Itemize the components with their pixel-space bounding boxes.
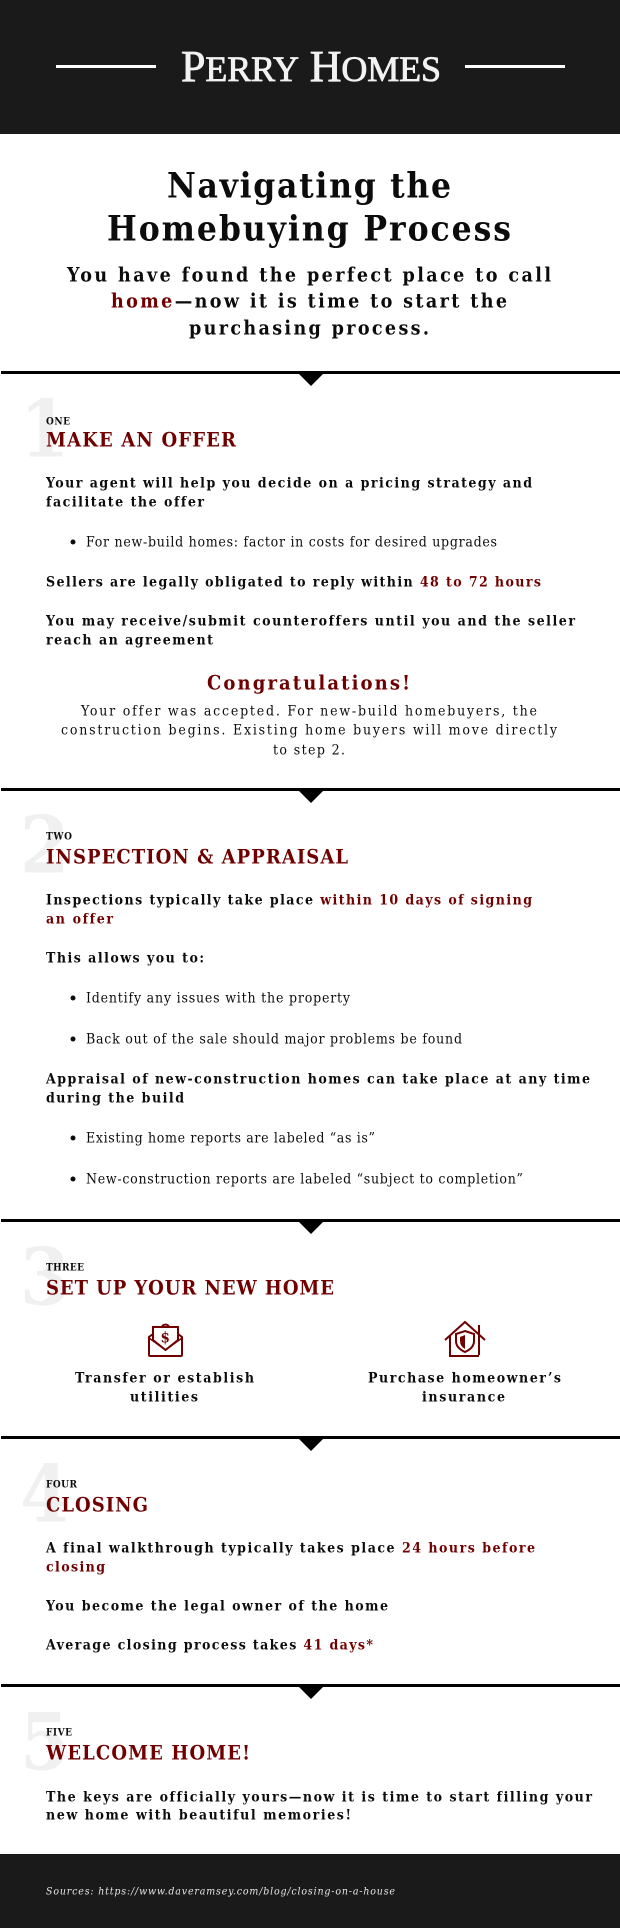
body text: Identify any issues with the property [86,990,351,1006]
header band [0,0,620,134]
body text: during the build [46,1090,184,1106]
body text: an offer [46,911,113,927]
divider 5 [1,1684,620,1699]
congratulations callout: construction begins. Existing home buyers will move directly [61,722,558,738]
section heading: SET UP YOUR NEW HOME [46,1275,334,1299]
icon: house with shield [445,1322,485,1356]
title: Navigating the [167,165,451,206]
icon: envelope with dollar [149,1324,182,1356]
divider 4 [1,1436,620,1451]
body text [45,475,575,648]
step label: ONE [46,416,70,427]
congratulations callout: to step 2. [273,742,345,758]
title [107,165,511,249]
body text: Back out of the sale should major problems be found [86,1031,462,1047]
body text [45,892,590,1187]
congratulations callout [61,670,558,758]
body text: You become the legal owner of the home [45,1598,388,1614]
section 3: set up your new home [20,1230,561,1405]
body text: For new-build homes: factor in costs for desired upgrades [86,534,497,550]
body text: Appraisal of new-construction homes can take place at any time [45,1071,590,1087]
utilities caption: utilities [130,1389,198,1405]
step number 2: 2 [20,798,69,891]
section heading: MAKE AN OFFER [46,427,237,451]
section heading: CLOSING [46,1492,148,1516]
body text: Sellers are legally obligated to reply within 48 to 72 hours [46,574,541,590]
section 5: welcome home [20,1695,592,1823]
congratulations callout: Your offer was accepted. For new-build homebuyers, the [80,703,537,719]
utilities caption [75,1370,254,1405]
step label: FOUR [46,1479,78,1490]
section 2: inspection and appraisal [20,798,590,1187]
intro text: home—now it is time to start the [111,289,507,312]
title: Homebuying Process [107,208,511,249]
insurance caption [368,1370,561,1405]
body text: Existing home reports are labeled “as is” [86,1130,375,1146]
divider 1 [1,371,620,386]
insurance caption: Purchase homeowner’s [368,1370,561,1386]
utilities caption: Transfer or establish [75,1370,254,1386]
body text: This allows you to: [46,950,204,966]
footer [0,1854,620,1928]
body text: Inspections typically take place within 10 days of signing [46,892,532,908]
body text: Average closing process takes 41 days* [45,1637,373,1653]
body text: New-construction reports are labeled “subject to completion” [86,1171,523,1187]
section 1: make an offer [20,382,575,758]
step number 1: 1 [20,382,69,475]
congratulations callout: Congratulations! [207,670,410,694]
intro text [66,263,551,339]
divider 3 [1,1219,620,1234]
body text: closing [46,1559,105,1575]
step label: THREE [46,1262,84,1273]
intro text: purchasing process. [189,316,429,339]
section heading: WELCOME HOME! [45,1740,250,1764]
section heading: INSPECTION & APPRAISAL [46,844,348,868]
section 4: closing [20,1447,535,1653]
insurance caption: insurance [422,1389,505,1405]
step label: TWO [46,831,72,842]
body text [45,1540,535,1653]
step number 3: 3 [20,1230,69,1323]
body text: facilitate the offer [46,494,204,510]
step number 4: 4 [20,1447,69,1540]
divider 2 [1,788,620,803]
step number 5: 5 [20,1695,69,1788]
body text: new home with beautiful memories! [46,1807,351,1823]
intro text: You have found the perfect place to call [66,263,551,286]
body text: The keys are officially yours—now it is time to start filling your [46,1789,592,1805]
body text: reach an agreement [46,632,213,648]
body text: Your agent will help you decide on a pricing strategy and [45,475,532,491]
step label: FIVE [46,1727,72,1738]
body text: You may receive/submit counteroffers until you and the seller [45,613,575,629]
body text [46,1789,592,1823]
body text: A final walkthrough typically takes place 24 hours before [45,1540,535,1556]
icon: envelope with dollar: $ [160,1328,170,1346]
logo wordmark: PERRY HOMES [181,42,441,91]
sources: Sources: https://www.daveramsey.com/blog/closing-on-a-house [46,1885,395,1897]
